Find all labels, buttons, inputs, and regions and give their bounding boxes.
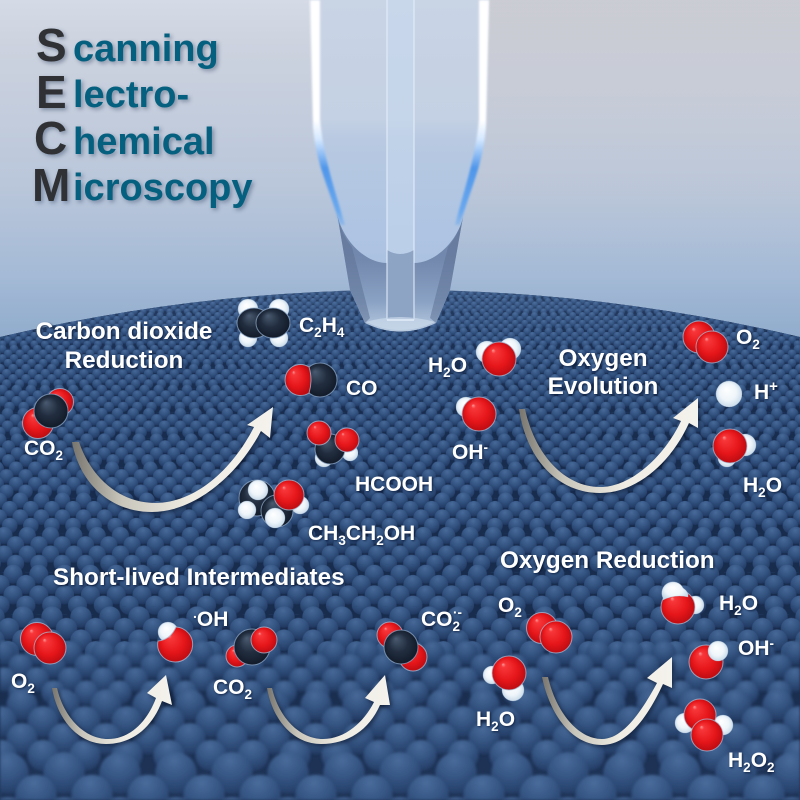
- molecule: CO2: [226, 627, 277, 667]
- label: O2: 2: [514, 605, 522, 620]
- panel: short-lived intermediates: [11, 564, 462, 744]
- title: hemical: [73, 121, 215, 163]
- heading: carbon dioxide reduction: Carbon dioxide: [36, 318, 212, 345]
- title: M: [32, 159, 70, 211]
- label: H2O2: 2: [767, 760, 775, 775]
- label: O2: 2: [27, 681, 35, 696]
- label: CH3CH2OH: CH: [308, 522, 338, 545]
- molecule: OH-: [456, 397, 496, 431]
- label: H2O: 2: [491, 719, 499, 734]
- label: H+: H: [754, 381, 769, 404]
- label: HCOOH: HCOOH: [355, 473, 433, 496]
- sphere surface: [0, 285, 800, 800]
- heading: carbon dioxide reduction: Reduction: [65, 347, 183, 374]
- probe tip: [310, 0, 489, 332]
- label: C2H4: 2: [314, 325, 322, 340]
- label: CO2: 2: [56, 448, 63, 463]
- label: H2O: 2: [443, 365, 451, 380]
- label: H2O product: O: [766, 474, 782, 497]
- molecule: H2O2: [675, 699, 733, 751]
- label: CO2 radical anion: CO: [421, 608, 452, 631]
- background: [0, 0, 800, 345]
- label: H2O2: O: [751, 749, 767, 772]
- arrow: oxygen evolution: [519, 398, 698, 493]
- label: CH3CH2OH: 3: [338, 533, 346, 548]
- arrow: CO2 reduction: [72, 407, 273, 512]
- label: OH-: OH: [452, 441, 484, 464]
- molecule: H2O product: [661, 582, 704, 624]
- title: icroscopy: [73, 167, 253, 209]
- molecule: CO2 radical anion: [377, 622, 427, 671]
- molecule: H2O reactant: [483, 656, 526, 701]
- label: H2O product: H: [743, 474, 758, 497]
- label: CO: CO: [346, 377, 378, 400]
- label: CH3CH2OH: CH: [346, 522, 376, 545]
- label: OH-: -: [770, 636, 774, 651]
- molecule: HCOOH: [307, 421, 359, 467]
- label: C2H4: 4: [337, 325, 345, 340]
- molecule: H+: [716, 381, 742, 407]
- label: CO2 radical anion: ·-: [453, 605, 462, 620]
- label: O2: O: [736, 326, 752, 349]
- heading: oxygen evolution: Oxygen: [558, 345, 648, 372]
- label: H2O2: 2: [743, 760, 751, 775]
- heading: oxygen reduction: Oxygen Reduction: [500, 547, 715, 574]
- label: OH radical: OH: [197, 608, 228, 631]
- arrow: oxygen reduction: [542, 657, 672, 745]
- label: C2H4: C: [299, 314, 314, 337]
- title: E: [36, 66, 67, 118]
- label: CH3CH2OH: 2: [376, 533, 384, 548]
- label: CO2: 2: [244, 687, 252, 702]
- molecule: CO: [285, 363, 337, 397]
- label: C2H4: H: [322, 314, 337, 337]
- label: H2O product: O: [742, 592, 758, 615]
- molecule: H2O reactant: [476, 338, 521, 376]
- title: C: [34, 112, 67, 164]
- title: canning: [73, 28, 219, 70]
- label: O2: 2: [752, 337, 760, 352]
- arrow: O2 to hydroxyl: [52, 675, 172, 744]
- molecule: hydroxyl radical: [158, 622, 193, 662]
- molecule: O2: [20, 622, 66, 664]
- molecule: O2: [526, 612, 572, 653]
- label: H2O: H: [476, 708, 491, 731]
- molecule: O2 product: [683, 321, 728, 363]
- label: OH radical: .: [193, 605, 197, 621]
- title: [32, 19, 253, 211]
- label: H+: +: [769, 378, 778, 395]
- label: H2O: O: [451, 354, 467, 377]
- label: H2O: H: [428, 354, 443, 377]
- panel: oxygen reduction: [476, 547, 775, 775]
- label: CH3CH2OH: OH: [384, 522, 415, 545]
- molecule: C2H4: [237, 299, 290, 347]
- label: CO2: CO: [24, 437, 56, 460]
- label: H2O: O: [499, 708, 515, 731]
- heading: short-lived intermediates: Short-lived Intermediates: [53, 564, 345, 591]
- title: lectro-: [73, 74, 189, 116]
- label: O2: O: [11, 670, 27, 693]
- molecule: ethanol: [238, 480, 309, 528]
- label: H2O product: 2: [758, 485, 766, 500]
- label: O2: O: [498, 594, 514, 617]
- arrow: CO2 to radical anion: [267, 675, 390, 744]
- panel: carbon dioxide reduction: [22, 299, 433, 548]
- molecule: H2O product: [713, 429, 756, 467]
- label: H2O2: H: [728, 749, 743, 772]
- molecule: OH-: [689, 641, 728, 679]
- molecule: CO2 reactant: [22, 388, 74, 438]
- label: OH-: -: [484, 440, 488, 455]
- title: S: [36, 19, 67, 71]
- label: OH-: OH: [738, 637, 770, 660]
- panel: oxygen evolution: [428, 321, 782, 500]
- label: H2O product: 2: [734, 603, 742, 618]
- label: CO2: CO: [213, 676, 244, 699]
- label: CO2 radical anion: 2: [452, 619, 460, 634]
- heading: oxygen evolution: Evolution: [548, 373, 658, 400]
- label: H2O product: H: [719, 592, 734, 615]
